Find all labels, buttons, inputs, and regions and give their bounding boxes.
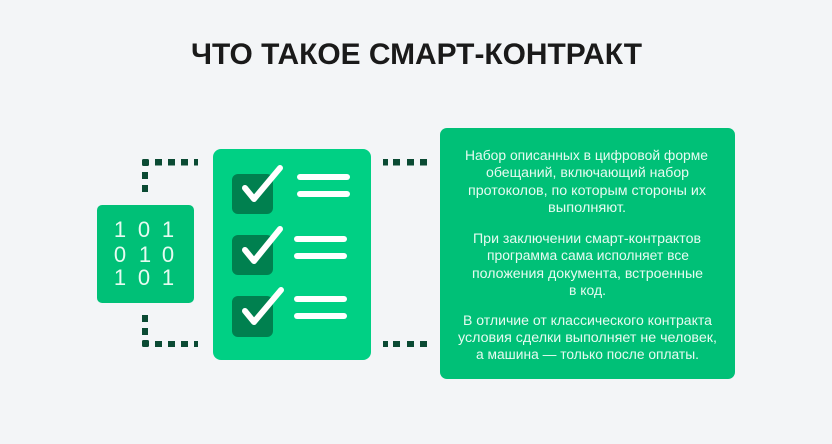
checklist item 2 [232, 229, 347, 275]
paragraph 3 [458, 313, 717, 362]
binary code card: 0 [138, 217, 150, 242]
paragraph 2: в код. [569, 283, 606, 298]
paragraph 2: При заключении смарт-контрактов [473, 231, 701, 246]
binary code card: 1 [114, 217, 126, 242]
dotted connector: code to checklist bottom [142, 315, 198, 347]
paragraph 3: а машина — только после оплаты. [476, 347, 699, 362]
dotted connector: checklist to text bottom [383, 341, 427, 347]
binary code card: 0 [138, 265, 150, 290]
binary code card: 1 [162, 265, 174, 290]
checklist document [213, 149, 371, 360]
dotted connector: checklist to text top [383, 159, 427, 166]
binary code card: 0 [114, 242, 126, 267]
checklist item 3 [232, 290, 347, 337]
binary code card [97, 205, 194, 303]
paragraph 2 [472, 231, 703, 298]
binary code card: 1 [114, 265, 126, 290]
paragraph 1 [465, 148, 708, 215]
paragraph 1: выполняют. [548, 200, 626, 215]
checklist item 1 [232, 168, 350, 214]
paragraph 3: условия сделки выполняет не человек, [458, 330, 717, 345]
binary code card: 1 [139, 242, 151, 267]
paragraph 1: протоколов, по которым стороны их [468, 183, 706, 198]
panel: description text [440, 128, 735, 379]
paragraph 1: Набор описанных в цифровой форме [465, 148, 708, 163]
paragraph 1: обещаний, включающий набор [486, 165, 689, 180]
title: ЧТО ТАКОЕ СМАРТ-КОНТРАКТ [191, 38, 642, 71]
binary code card: 1 [162, 217, 174, 242]
paragraph 3: В отличие от классического контракта [463, 313, 713, 328]
paragraph 2: программа сама исполняет все [487, 248, 689, 263]
binary code card: 0 [162, 242, 174, 267]
dotted connector: code to checklist top [142, 159, 198, 192]
paragraph 2: положения документа, встроенные [472, 266, 703, 281]
